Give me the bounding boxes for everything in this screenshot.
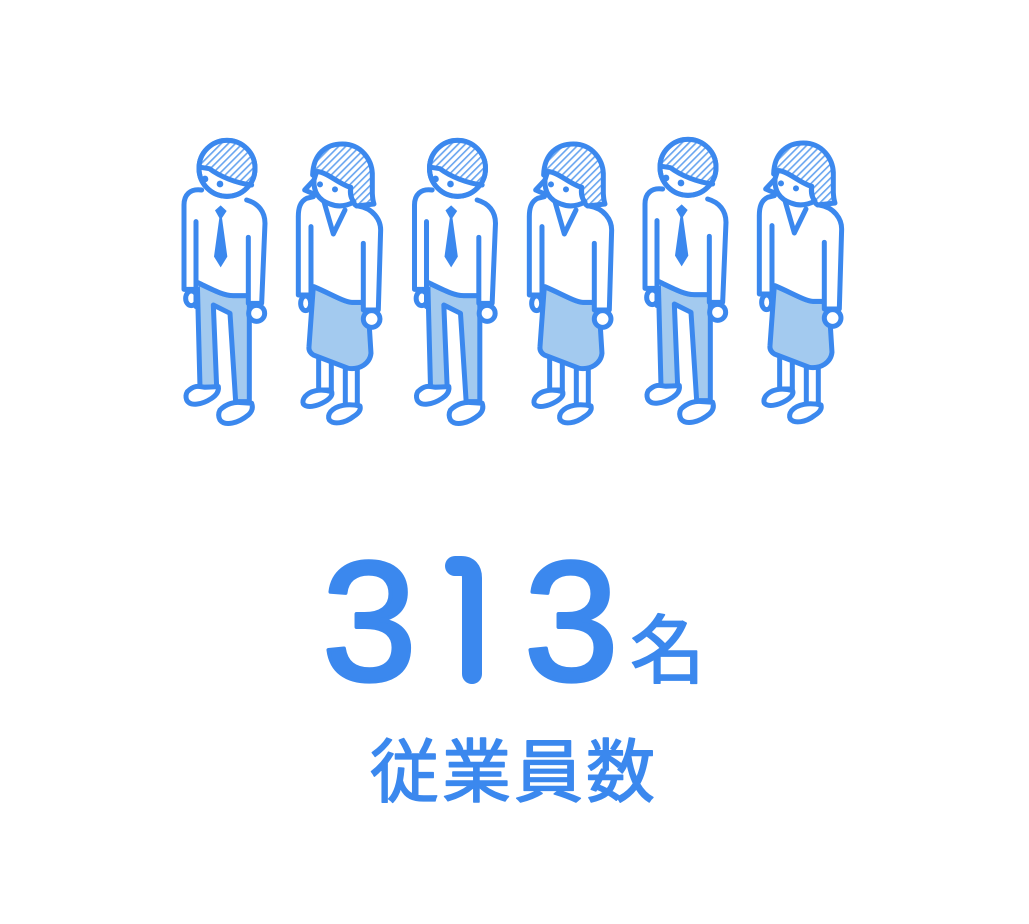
icon: employee woman 2 <box>529 144 612 423</box>
caption: 従業員数: 従業員数 <box>370 734 658 811</box>
headline number: 313: 1 <box>425 527 520 717</box>
icon: employee man 2 <box>414 137 495 424</box>
headline number: 313: 3 <box>322 527 417 717</box>
icon: employee woman 1 <box>298 144 381 423</box>
headline number: 313 <box>326 556 614 684</box>
icon: employee man 3 <box>645 136 726 423</box>
unit label: 名: 名 <box>630 609 705 693</box>
icon: employee woman 3 <box>759 143 842 422</box>
headline number: 313: 3 <box>524 527 619 717</box>
icon: employee man 1 <box>184 137 265 424</box>
